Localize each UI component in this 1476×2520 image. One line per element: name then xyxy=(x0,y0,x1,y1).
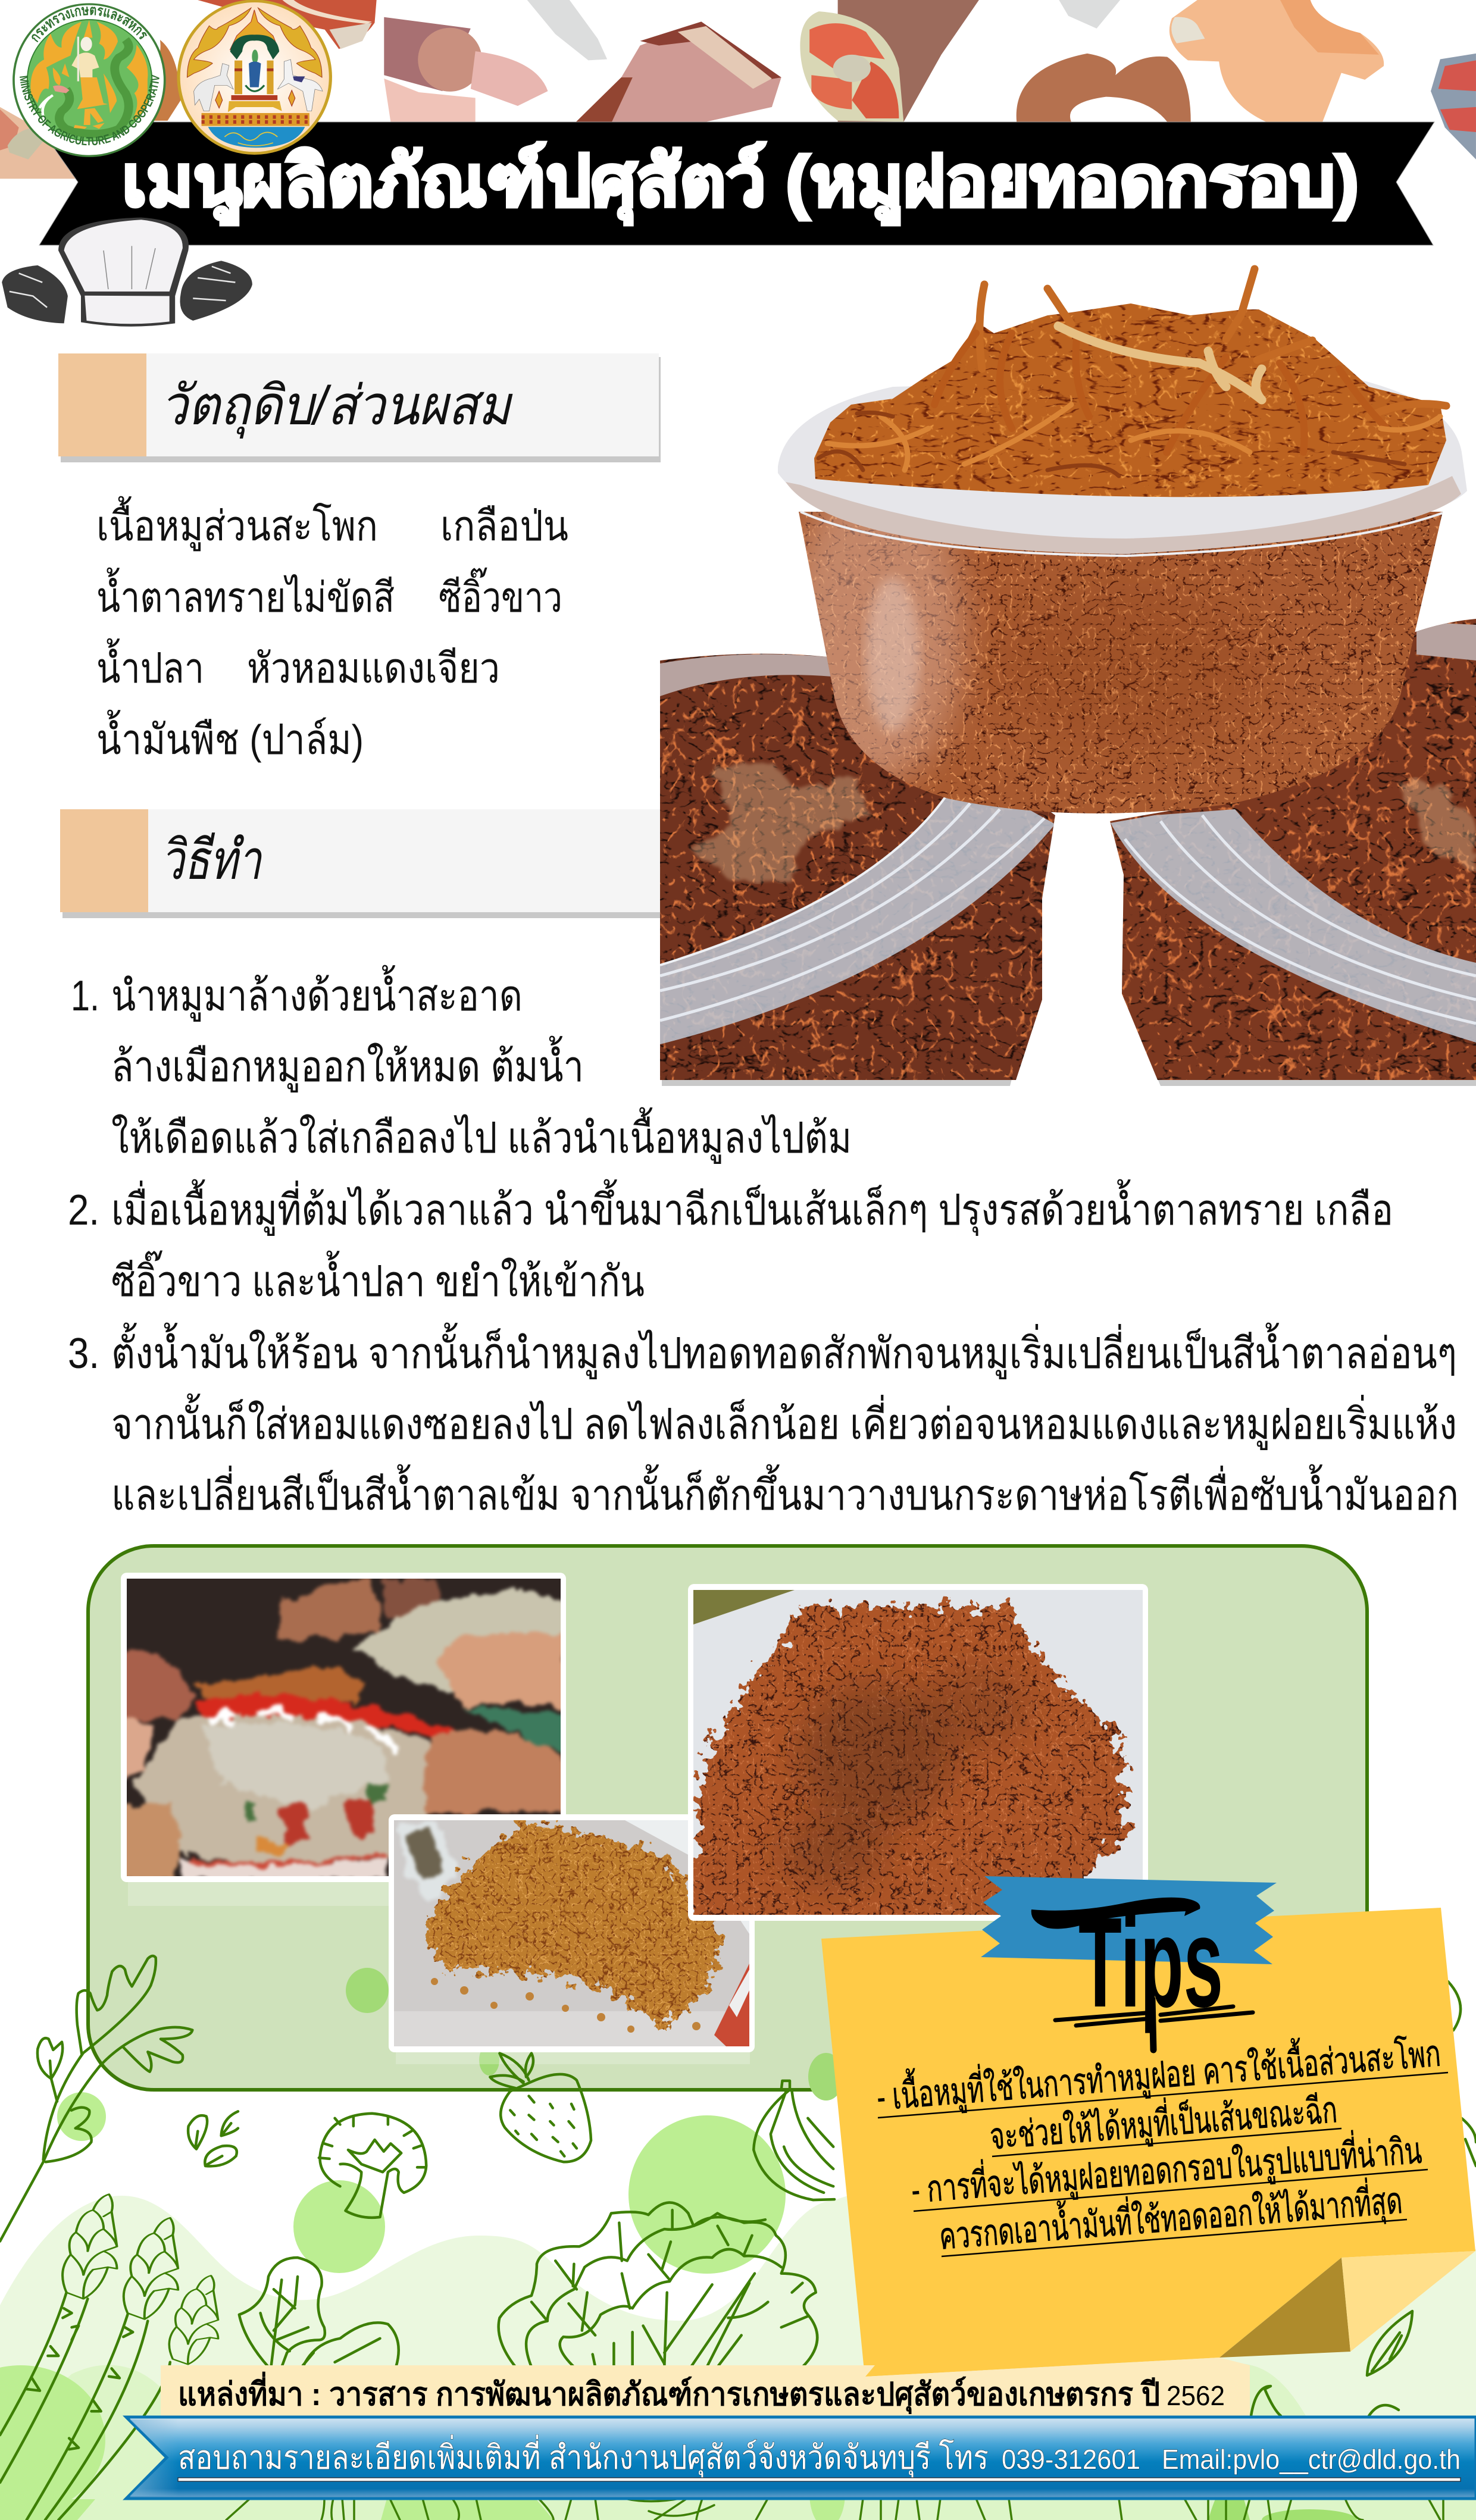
onion xyxy=(753,2081,834,2200)
text block: ingredients list: น้ำตาลทรายไม่ขัดสี xyxy=(96,567,395,621)
blue tape xyxy=(981,1876,1277,1964)
tips wordmark: Tips xyxy=(1078,1890,1223,2034)
spinach xyxy=(239,2258,399,2367)
tips text xyxy=(875,2027,1442,2259)
source note: 2562 xyxy=(1167,2380,1225,2411)
asparagus xyxy=(0,2195,218,2520)
text block: cooking method steps: 3. xyxy=(68,1330,99,1378)
logo: Department of Livestock Development xyxy=(179,1,330,154)
tips underlines xyxy=(878,2073,1448,2256)
source note xyxy=(161,2358,1250,2417)
strawberry xyxy=(490,2053,591,2162)
text block: ingredients list: ซีอิ๊วขาว xyxy=(439,568,562,621)
text block: ingredients list: น้ำปลา xyxy=(96,638,204,691)
text block: cooking method steps: 2. xyxy=(68,1187,99,1234)
contact text: 039-312601 xyxy=(1002,2444,1140,2475)
text block: ingredients list: เนื้อหมูส่วนสะโพก xyxy=(96,496,378,552)
shadow xyxy=(662,1079,1476,1086)
background: green hills and blobs xyxy=(0,2092,1476,2520)
tips wordmark xyxy=(1031,1890,1253,2050)
logo ring text xyxy=(37,15,143,43)
photo: finished shredded pork on paper xyxy=(684,1584,1148,1928)
text block: cooking method steps: ให้เดือดแล้วใส่เกลือลงไป แล้วนำเนื้อหมูลงไปต้ม xyxy=(111,1107,852,1164)
title banner xyxy=(36,122,1434,245)
panel: green photo panel xyxy=(88,1546,1367,2100)
contact text: สอบถามรายละเอียดเพิ่มเติมที่ สำนักงานปศุสัตว์จังหวัดจันทบุรี โทร xyxy=(178,2434,989,2478)
title text: เมนูผลิตภัณฑ์ปศุสัตว์ (หมูฝอยทอดกรอบ) xyxy=(122,142,1359,225)
contact banner xyxy=(126,2417,1476,2499)
photo: crispy fried pork pile xyxy=(389,1814,755,2052)
meat: sausage links xyxy=(1017,54,1191,122)
meat: top steak behind logos xyxy=(198,0,377,49)
photo: hands shredding boiled pork xyxy=(119,1571,571,1886)
meat: ham leg xyxy=(800,0,979,122)
meat: sliced sausage xyxy=(384,17,548,122)
illustration: right side leaf and vines xyxy=(1251,1981,1476,2416)
decoration: grey utensils xyxy=(527,0,1120,60)
text block: cooking method steps: นำหมูมาล้างด้วยน้ำสะอาด xyxy=(111,965,523,1022)
contact text: Email:pvlo__ctr@dld.go.th xyxy=(1162,2444,1461,2475)
illustration: vine over panel corner xyxy=(0,1956,238,2242)
panel: method heading xyxy=(60,809,664,918)
source note: แหล่งที่มา : วารสาร การพัฒนาผลิตภัณฑ์การเกษตรและปศุสัตว์ของเกษตรกร ปี xyxy=(178,2371,1160,2415)
top tub pork strands xyxy=(814,303,1446,497)
text block: cooking method steps: 1. xyxy=(71,972,99,1020)
meat: chicken leg xyxy=(1169,0,1384,122)
panel: tips sticky note xyxy=(821,1876,1475,2377)
meat: far-right ham edge xyxy=(1431,54,1476,159)
text block: cooking method steps xyxy=(68,965,1459,1519)
meat: bacon slab xyxy=(576,21,781,122)
top tub rim xyxy=(778,375,1467,554)
photo: shredded pork in three plastic tubs xyxy=(660,269,1476,1086)
illustration: vegetable line art xyxy=(0,2053,834,2520)
text block: cooking method steps: ล้างเมือกหมูออกให้หมด ต้มน้ำ xyxy=(111,1035,584,1092)
panel: ingredients heading: วัตถุดิบ/ส่วนผสม xyxy=(160,375,513,439)
right tub xyxy=(1107,613,1476,1083)
text block: ingredients list xyxy=(96,496,568,763)
text block: ingredients list: น้ำมันพืช (ปาล์ม) xyxy=(96,709,364,763)
panel: method heading: วิธีทำ xyxy=(161,830,263,891)
text block: cooking method steps: ซีอิ๊วขาว และน้ำปลา ขยำให้เข้ากัน xyxy=(111,1250,645,1306)
meat: lower-left pork behind logos xyxy=(0,40,181,179)
text block: ingredients list: เกลือป่น xyxy=(440,503,568,549)
lettuce xyxy=(499,2203,817,2367)
note paper xyxy=(821,1908,1475,2377)
banner shape xyxy=(36,122,1434,245)
illustration: bottom strip line art xyxy=(226,2496,1443,2520)
contact text xyxy=(178,2434,1461,2478)
top tub body xyxy=(799,512,1443,813)
panel: ingredients heading xyxy=(58,353,661,462)
illustration: header meat collage xyxy=(0,0,1476,179)
broccoli xyxy=(319,2114,426,2218)
left tub xyxy=(660,649,1065,1083)
note folded corner xyxy=(1219,2258,1350,2358)
text block: ingredients list: หัวหอมแดงเจียว xyxy=(247,645,500,691)
icon: chef hat with steaks xyxy=(2,217,252,327)
